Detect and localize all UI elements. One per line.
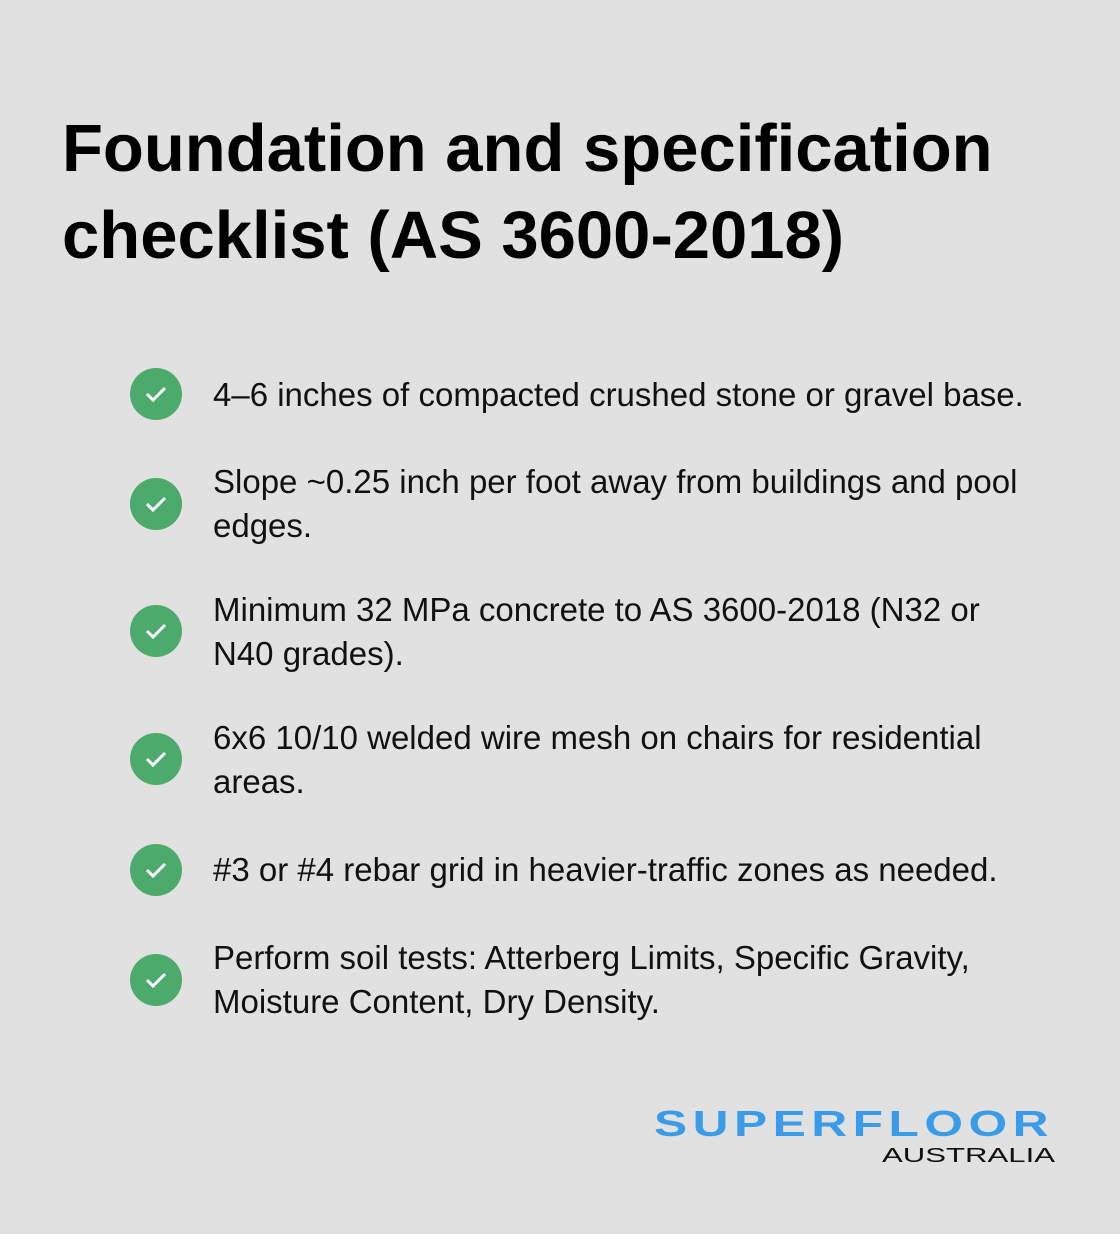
text: Moisture Content, Dry Density.: [213, 983, 660, 1020]
item 6: [130, 939, 970, 1020]
icon: check: [130, 844, 182, 896]
logo: SUPERFLOOR: [654, 1103, 1054, 1144]
text: [213, 719, 982, 800]
text: [213, 939, 970, 1020]
text: [213, 591, 980, 672]
text: #3 or #4 rebar grid in heavier-traffic zones as needed.: [213, 851, 998, 888]
title: checklist (AS 3600-2018): [62, 198, 844, 273]
icon: check: [130, 605, 182, 657]
text: Perform soil tests: Atterberg Limits, Specific Gravity,: [213, 939, 970, 976]
icon: check: [130, 954, 182, 1006]
text: Minimum 32 MPa concrete to AS 3600-2018 (N32 or: [213, 591, 980, 628]
icon: check: [130, 733, 182, 785]
icon: check: [130, 478, 182, 530]
text: 6x6 10/10 welded wire mesh on chairs for residential: [213, 719, 982, 756]
item 5: [130, 844, 998, 896]
item 2: [130, 463, 1017, 544]
title: Foundation and specification: [62, 111, 993, 186]
logo: AUSTRALIA: [882, 1145, 1056, 1167]
text: 4–6 inches of compacted crushed stone or gravel base.: [213, 376, 1024, 413]
title: [62, 111, 993, 273]
item 3: [130, 591, 980, 672]
text: areas.: [213, 763, 305, 800]
item 1: [130, 368, 1024, 420]
text: N40 grades).: [213, 635, 404, 672]
logo: [654, 1103, 1056, 1167]
item 4: [130, 719, 982, 800]
icon: check: [130, 368, 182, 420]
text: [213, 463, 1017, 544]
text: Slope ~0.25 inch per foot away from buildings and pool: [213, 463, 1017, 500]
text: edges.: [213, 507, 312, 544]
